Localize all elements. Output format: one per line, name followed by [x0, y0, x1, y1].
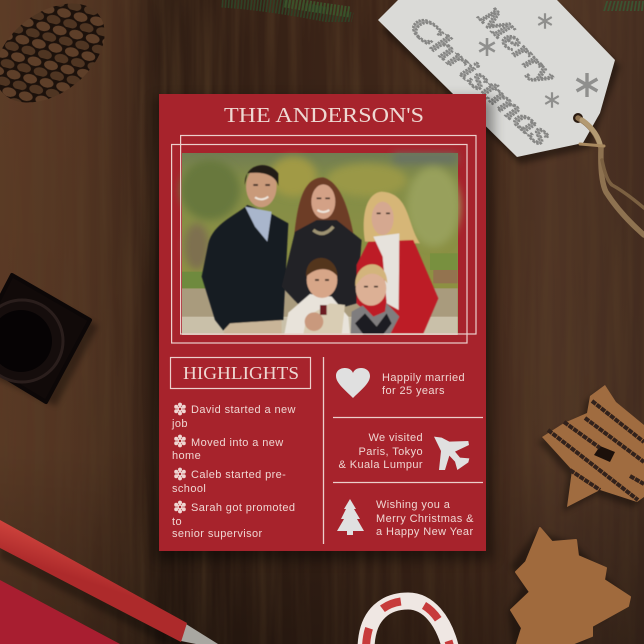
tree cookie [508, 528, 630, 644]
travel text: & Kuala Lumpur [339, 459, 423, 471]
boy right [351, 264, 399, 334]
pine branch top [222, 0, 352, 20]
greeting text: a Happy New Year [376, 526, 474, 538]
married text: Happily married [382, 372, 465, 384]
star cookie [538, 385, 644, 512]
greeting text: Merry Christmas & [376, 513, 474, 525]
highlights list: job [171, 418, 188, 430]
highlights heading: HIGHLIGHTS [183, 363, 299, 383]
tag text: Christmas [403, 7, 559, 152]
dividers [324, 357, 483, 544]
double frame around photo [172, 136, 476, 343]
card shadow [155, 98, 493, 560]
red notebook [0, 580, 120, 644]
married text: for 25 years [382, 385, 445, 397]
tag text [403, 0, 562, 152]
highlights list: school [172, 483, 206, 495]
highlights list: to [172, 516, 182, 528]
travel text [339, 432, 423, 471]
ink bottle [0, 275, 98, 406]
highlights list: Sarah got promoted [191, 502, 295, 514]
pine branch top right [606, 2, 644, 10]
highlights list [171, 403, 296, 540]
road and grass [182, 253, 458, 335]
icon: heart [336, 368, 370, 398]
family photo [180, 153, 460, 335]
pine cone [0, 0, 123, 123]
icon: christmas tree [337, 499, 364, 535]
man [202, 165, 288, 334]
red pen [0, 520, 218, 644]
greeting text [376, 499, 474, 538]
icon: airplane [434, 437, 469, 470]
candy cane [366, 601, 451, 644]
grandmother [357, 192, 438, 333]
gift tag [378, 0, 620, 164]
highlights heading [170, 358, 310, 388]
title: THE ANDERSON'S [224, 103, 424, 127]
highlights list: home [172, 450, 201, 462]
married text [382, 372, 465, 397]
twine [578, 118, 644, 235]
mother [282, 177, 362, 317]
highlights list: senior supervisor [172, 528, 263, 540]
highlights list: Moved into a new [191, 437, 284, 449]
highlights list: Caleb started pre- [191, 469, 286, 481]
greeting text: Wishing you a [376, 499, 451, 511]
boy left [284, 258, 350, 334]
travel text: We visited [368, 432, 423, 444]
travel text: Paris, Tokyo [358, 446, 423, 458]
highlights list: David started a new [191, 404, 296, 416]
tag text: Merry [472, 0, 562, 91]
panel: holiday card [159, 94, 486, 551]
